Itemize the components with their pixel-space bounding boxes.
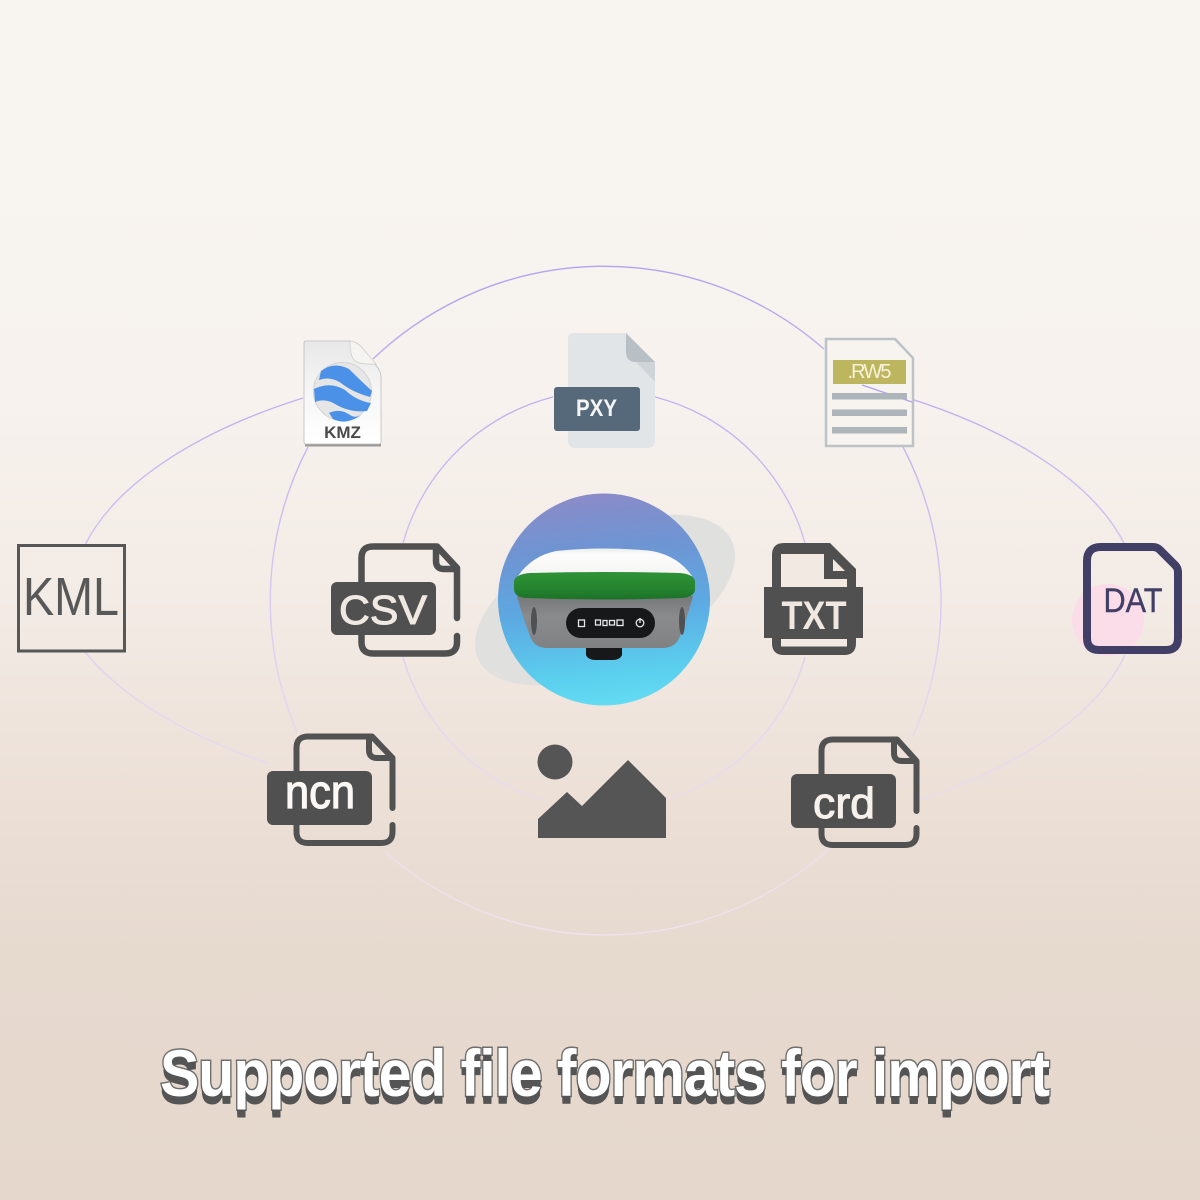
icon: DAT file: DAT bbox=[1104, 582, 1162, 620]
icon: KML file bbox=[18, 546, 124, 651]
icon: image file bbox=[538, 744, 666, 838]
gradient disc bbox=[498, 494, 710, 706]
icon: CSV file: CSV bbox=[339, 587, 428, 633]
icon: PXY file: PXY bbox=[576, 395, 617, 422]
grey orbit blob bbox=[449, 479, 761, 721]
icon: DAT file bbox=[1072, 547, 1178, 656]
central receiver badge bbox=[449, 479, 761, 721]
icon: KMZ file bbox=[304, 341, 381, 446]
globe bbox=[314, 362, 372, 422]
icon: RW5 file: .RW5 bbox=[848, 361, 892, 383]
icon: TXT file bbox=[764, 543, 863, 655]
icon: RW5 file bbox=[826, 339, 913, 446]
icon: crd file: crd bbox=[813, 779, 875, 828]
icon: PXY file bbox=[554, 333, 655, 448]
icon: CSV file bbox=[331, 546, 457, 654]
icon: KMZ file: KMZ bbox=[324, 423, 361, 442]
title: Supported file formats for import bbox=[160, 1036, 1049, 1110]
icon: crd file bbox=[791, 740, 916, 845]
orbit lines bbox=[85, 266, 1125, 935]
icon: KML file: KML bbox=[23, 567, 119, 627]
icon: ncn file: ncn bbox=[285, 765, 355, 818]
GNSS receiver bbox=[514, 548, 695, 660]
icon: TXT file: TXT bbox=[782, 594, 846, 638]
icon: ncn file bbox=[267, 736, 392, 843]
